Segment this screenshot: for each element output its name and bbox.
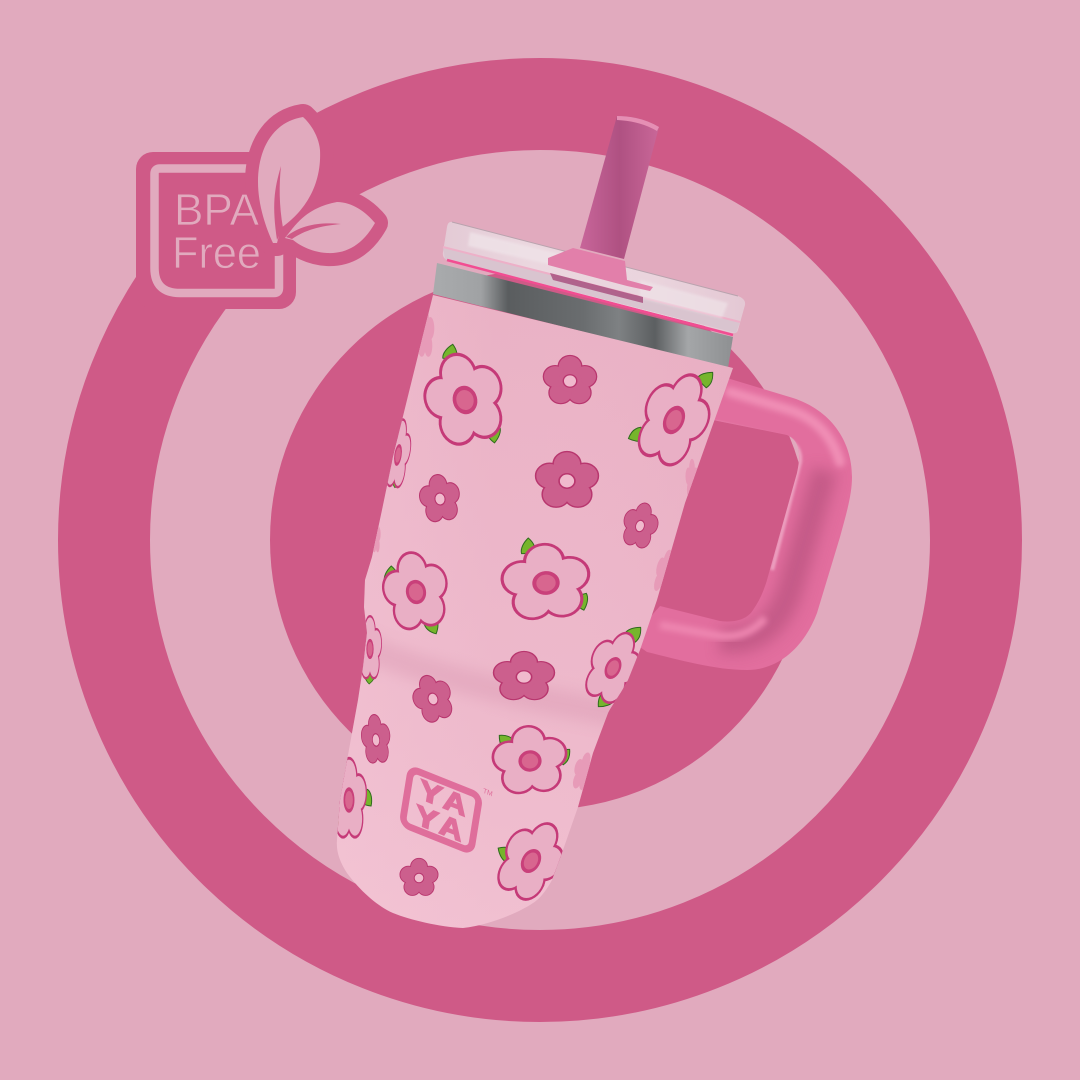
tumbler body: [337, 295, 733, 928]
straw base: [548, 248, 653, 291]
target ring: outer: [104, 104, 976, 976]
logo: YAYA: [402, 759, 493, 857]
logo: YAYA: A: [437, 808, 465, 848]
logo: YAYA: Y: [413, 799, 441, 838]
handle: [630, 368, 852, 670]
icon: BPA Free badge: [136, 117, 375, 309]
logo: YAYA: TM: [482, 788, 493, 798]
lid: [443, 222, 745, 335]
flower pattern: [332, 306, 722, 906]
straw: [580, 116, 659, 259]
target disc: centre: [270, 270, 810, 810]
logo: YAYA: A: [441, 783, 469, 822]
steel collar: [433, 263, 733, 368]
icon: BPA Free badge: Free: [172, 229, 261, 278]
badge text: BPA: [174, 186, 259, 235]
logo: YAYA: Y: [417, 773, 445, 813]
